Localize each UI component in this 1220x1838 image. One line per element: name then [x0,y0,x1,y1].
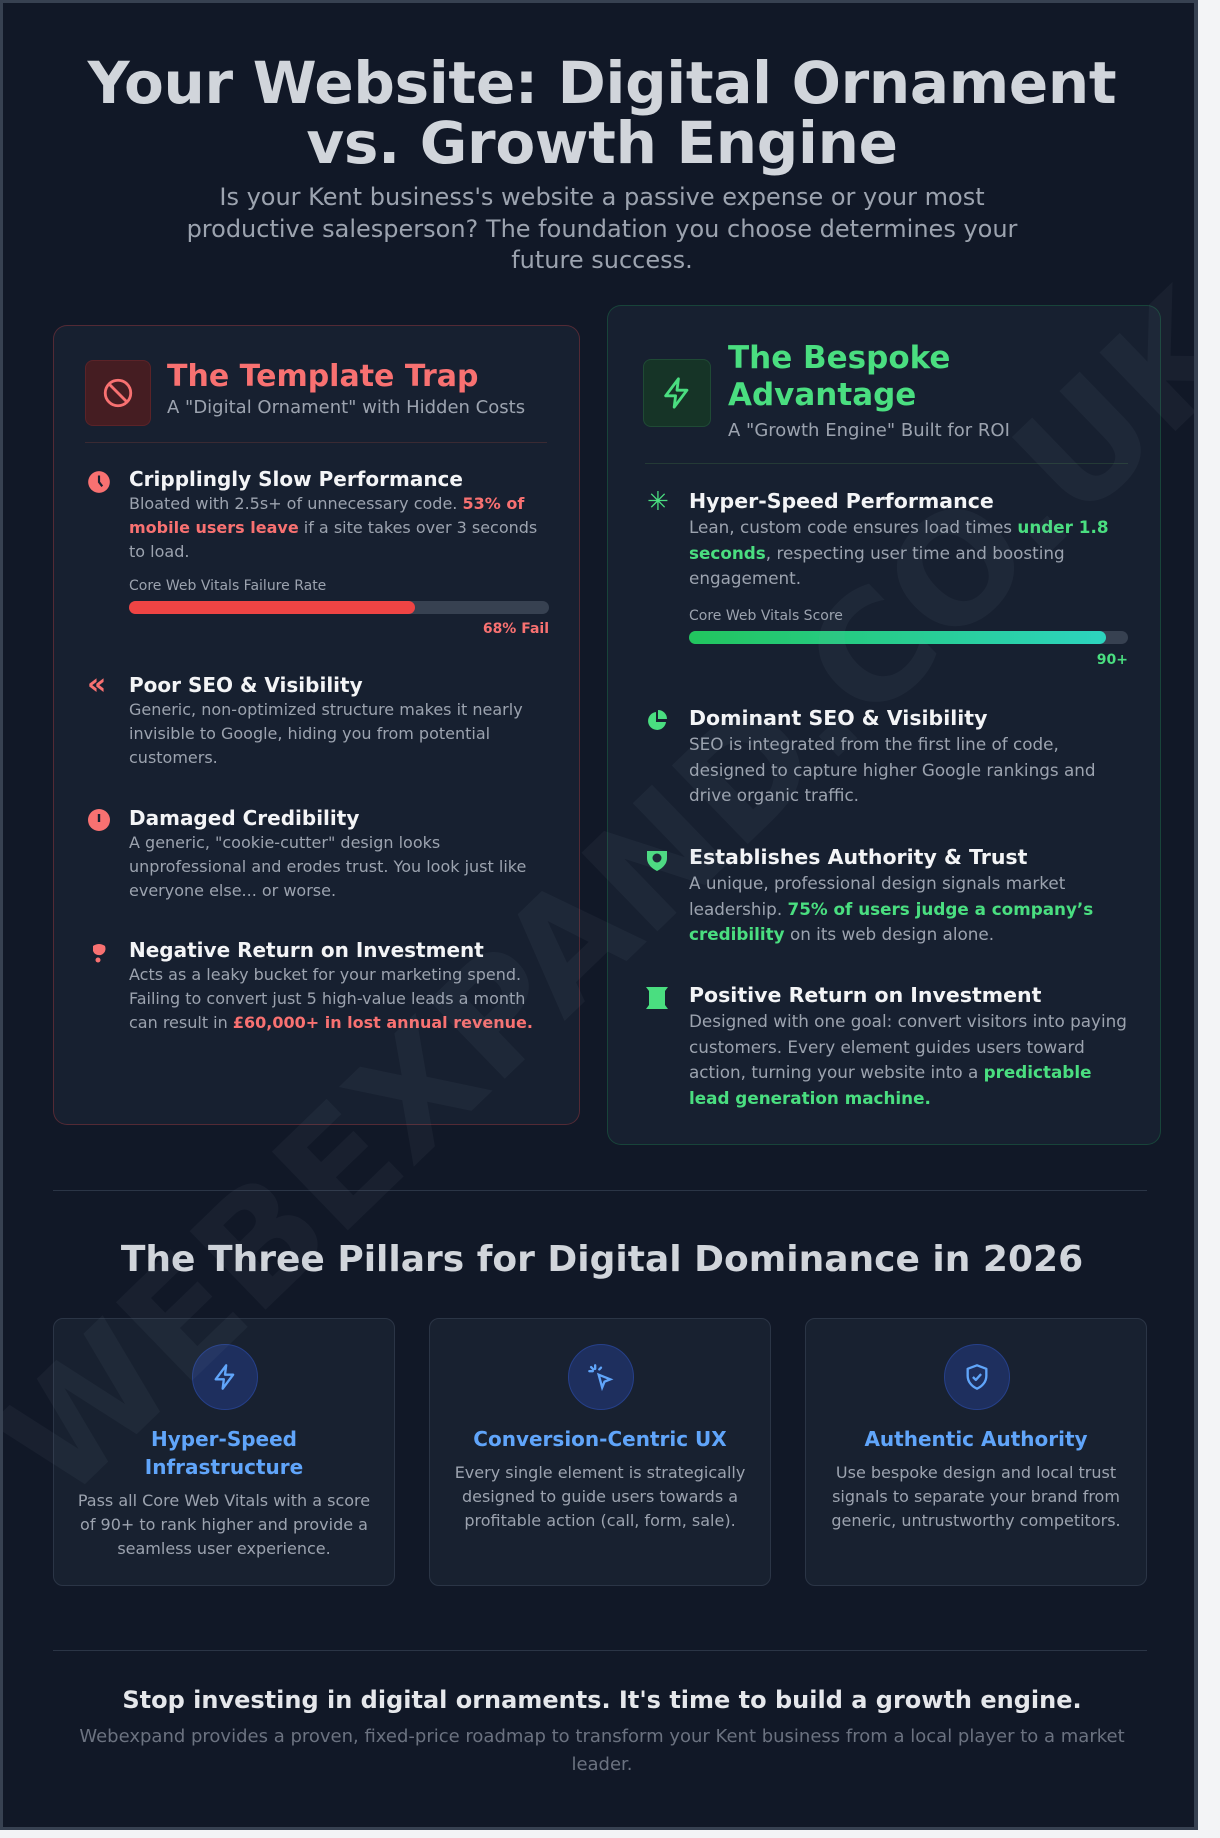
item: positive roi: Positive Return on Investment [689,983,1041,1007]
icon: bolt [192,1344,258,1410]
panel: template trap [53,325,580,1125]
card: authentic authority [805,1318,1147,1586]
item: slow performance [88,467,549,637]
heading: bespoke: The Bespoke [728,340,950,376]
icon: cursor click [568,1344,634,1410]
icon: ban [85,360,151,426]
heading: template trap: A "Digital Ornament" with Hidden Costs [167,397,525,418]
card: authentic authority: Use bespoke design and local trust signals to separate your brand from generic, untrustworthy competitors. [831,1463,1121,1530]
icon: block [646,987,668,1009]
item: dominant seo: Dominant SEO & Visibility [689,706,987,730]
title: vs. Growth Engine [306,109,898,177]
heading: bespoke: Advantage [728,377,916,413]
icon: pie [648,710,667,730]
icon: chevrons: « [87,667,106,702]
item: hyper-speed: Lean, custom code ensures load times under 1.8 seconds, respecting user time and boosting engagement. [689,517,1109,588]
card: hyper-speed infrastructure: Hyper-Speed [151,1427,297,1451]
item: negative roi: Acts as a leaky bucket for your marketing spend. Failing to convert just 5 high-value leads a month can result in £60,000+ in lost annual revenue. [129,965,533,1032]
bar chart: score: 90+ [1097,652,1128,668]
item: poor seo: Generic, non-optimized structure makes it nearly invisible to Google, hiding you from potential customers. [129,700,523,767]
item: credibility [88,806,526,900]
icon: clock [88,471,110,493]
item: poor seo [87,667,523,767]
heading: three pillars: The Three Pillars for Digital Dominance in 2026 [121,1239,1083,1280]
item: negative roi [93,938,533,1032]
bar chart: failure rate: Core Web Vitals Failure Rate [129,578,326,594]
card: conversion ux: Conversion-Centric UX [473,1427,727,1451]
icon: alert [88,809,110,831]
item: negative roi: Negative Return on Investment [129,938,484,962]
title [87,49,1116,177]
item: positive roi: Designed with one goal: convert visitors into paying customers. Every element guides users toward action, turning your website into a predictable lead generation machine. [689,1011,1127,1108]
card: conversion ux: Every single element is strategically designed to guide users towards a profitable action (call, form, sale). [455,1463,745,1530]
bar chart: score [689,608,1128,668]
card: hyper-speed infrastructure: Pass all Core Web Vitals with a score of 90+ to rank higher and provide a seamless user experience. [78,1491,370,1558]
item: authority: A unique, professional design signals market leadership. 75% of users judge a company’s credibility on its web design alone. [689,873,1093,944]
card: hyper-speed infrastructure: Infrastructure [145,1455,303,1479]
heading: template trap: The Template Trap [167,359,479,394]
item: dominant seo: SEO is integrated from the first line of code, designed to capture higher Google rankings and drive organic traffic. [689,734,1096,805]
title: Your Website: Digital Ornament [88,49,1116,117]
footer cta: Webexpand provides a proven, fixed-price roadmap to transform your Kent business from a local player to a market leader. [79,1726,1125,1775]
heading: bespoke: A "Growth Engine" Built for ROI [728,420,1010,441]
icon: shield [647,851,667,871]
item: authority [647,845,1093,944]
item: hyper-speed [647,487,1128,668]
card: conversion ux [429,1318,771,1586]
icon: bolt [643,359,711,427]
subtitle: Is your Kent business's website a passive expense or your most productive salesperson? The foundation you choose determines your future success. [187,183,1017,274]
footer cta [79,1686,1125,1775]
panel: bespoke advantage [607,305,1161,1145]
item: dominant seo [648,706,1096,805]
bar chart: score: Core Web Vitals Score [689,608,843,624]
item: poor seo: Poor SEO & Visibility [129,673,363,697]
item: slow performance: Bloated with 2.5s+ of unnecessary code. 53% of mobile users leave if a site takes over 3 seconds to load. [129,494,537,561]
item: authority: Establishes Authority & Trust [689,845,1027,869]
icon: spark: ✳ [647,487,669,517]
icon: shield check [944,1344,1010,1410]
item: credibility: Damaged Credibility [129,806,359,830]
item: hyper-speed: Hyper-Speed Performance [689,489,994,513]
card: hyper-speed infrastructure [53,1318,395,1586]
card: authentic authority: Authentic Authority [864,1427,1088,1451]
footer cta: Stop investing in digital ornaments. It's time to build a growth engine. [122,1686,1082,1714]
bar chart: failure rate: 68% Fail [483,621,549,637]
icon: leak [93,944,106,962]
heading: template trap [167,359,525,418]
heading: bespoke [728,340,1010,441]
item: slow performance: Cripplingly Slow Performance [129,467,463,491]
item: credibility: A generic, "cookie-cutter" design looks unprofessional and erodes trust. You look just like everyone else... or worse. [129,833,526,900]
bar chart: failure rate [129,578,549,637]
